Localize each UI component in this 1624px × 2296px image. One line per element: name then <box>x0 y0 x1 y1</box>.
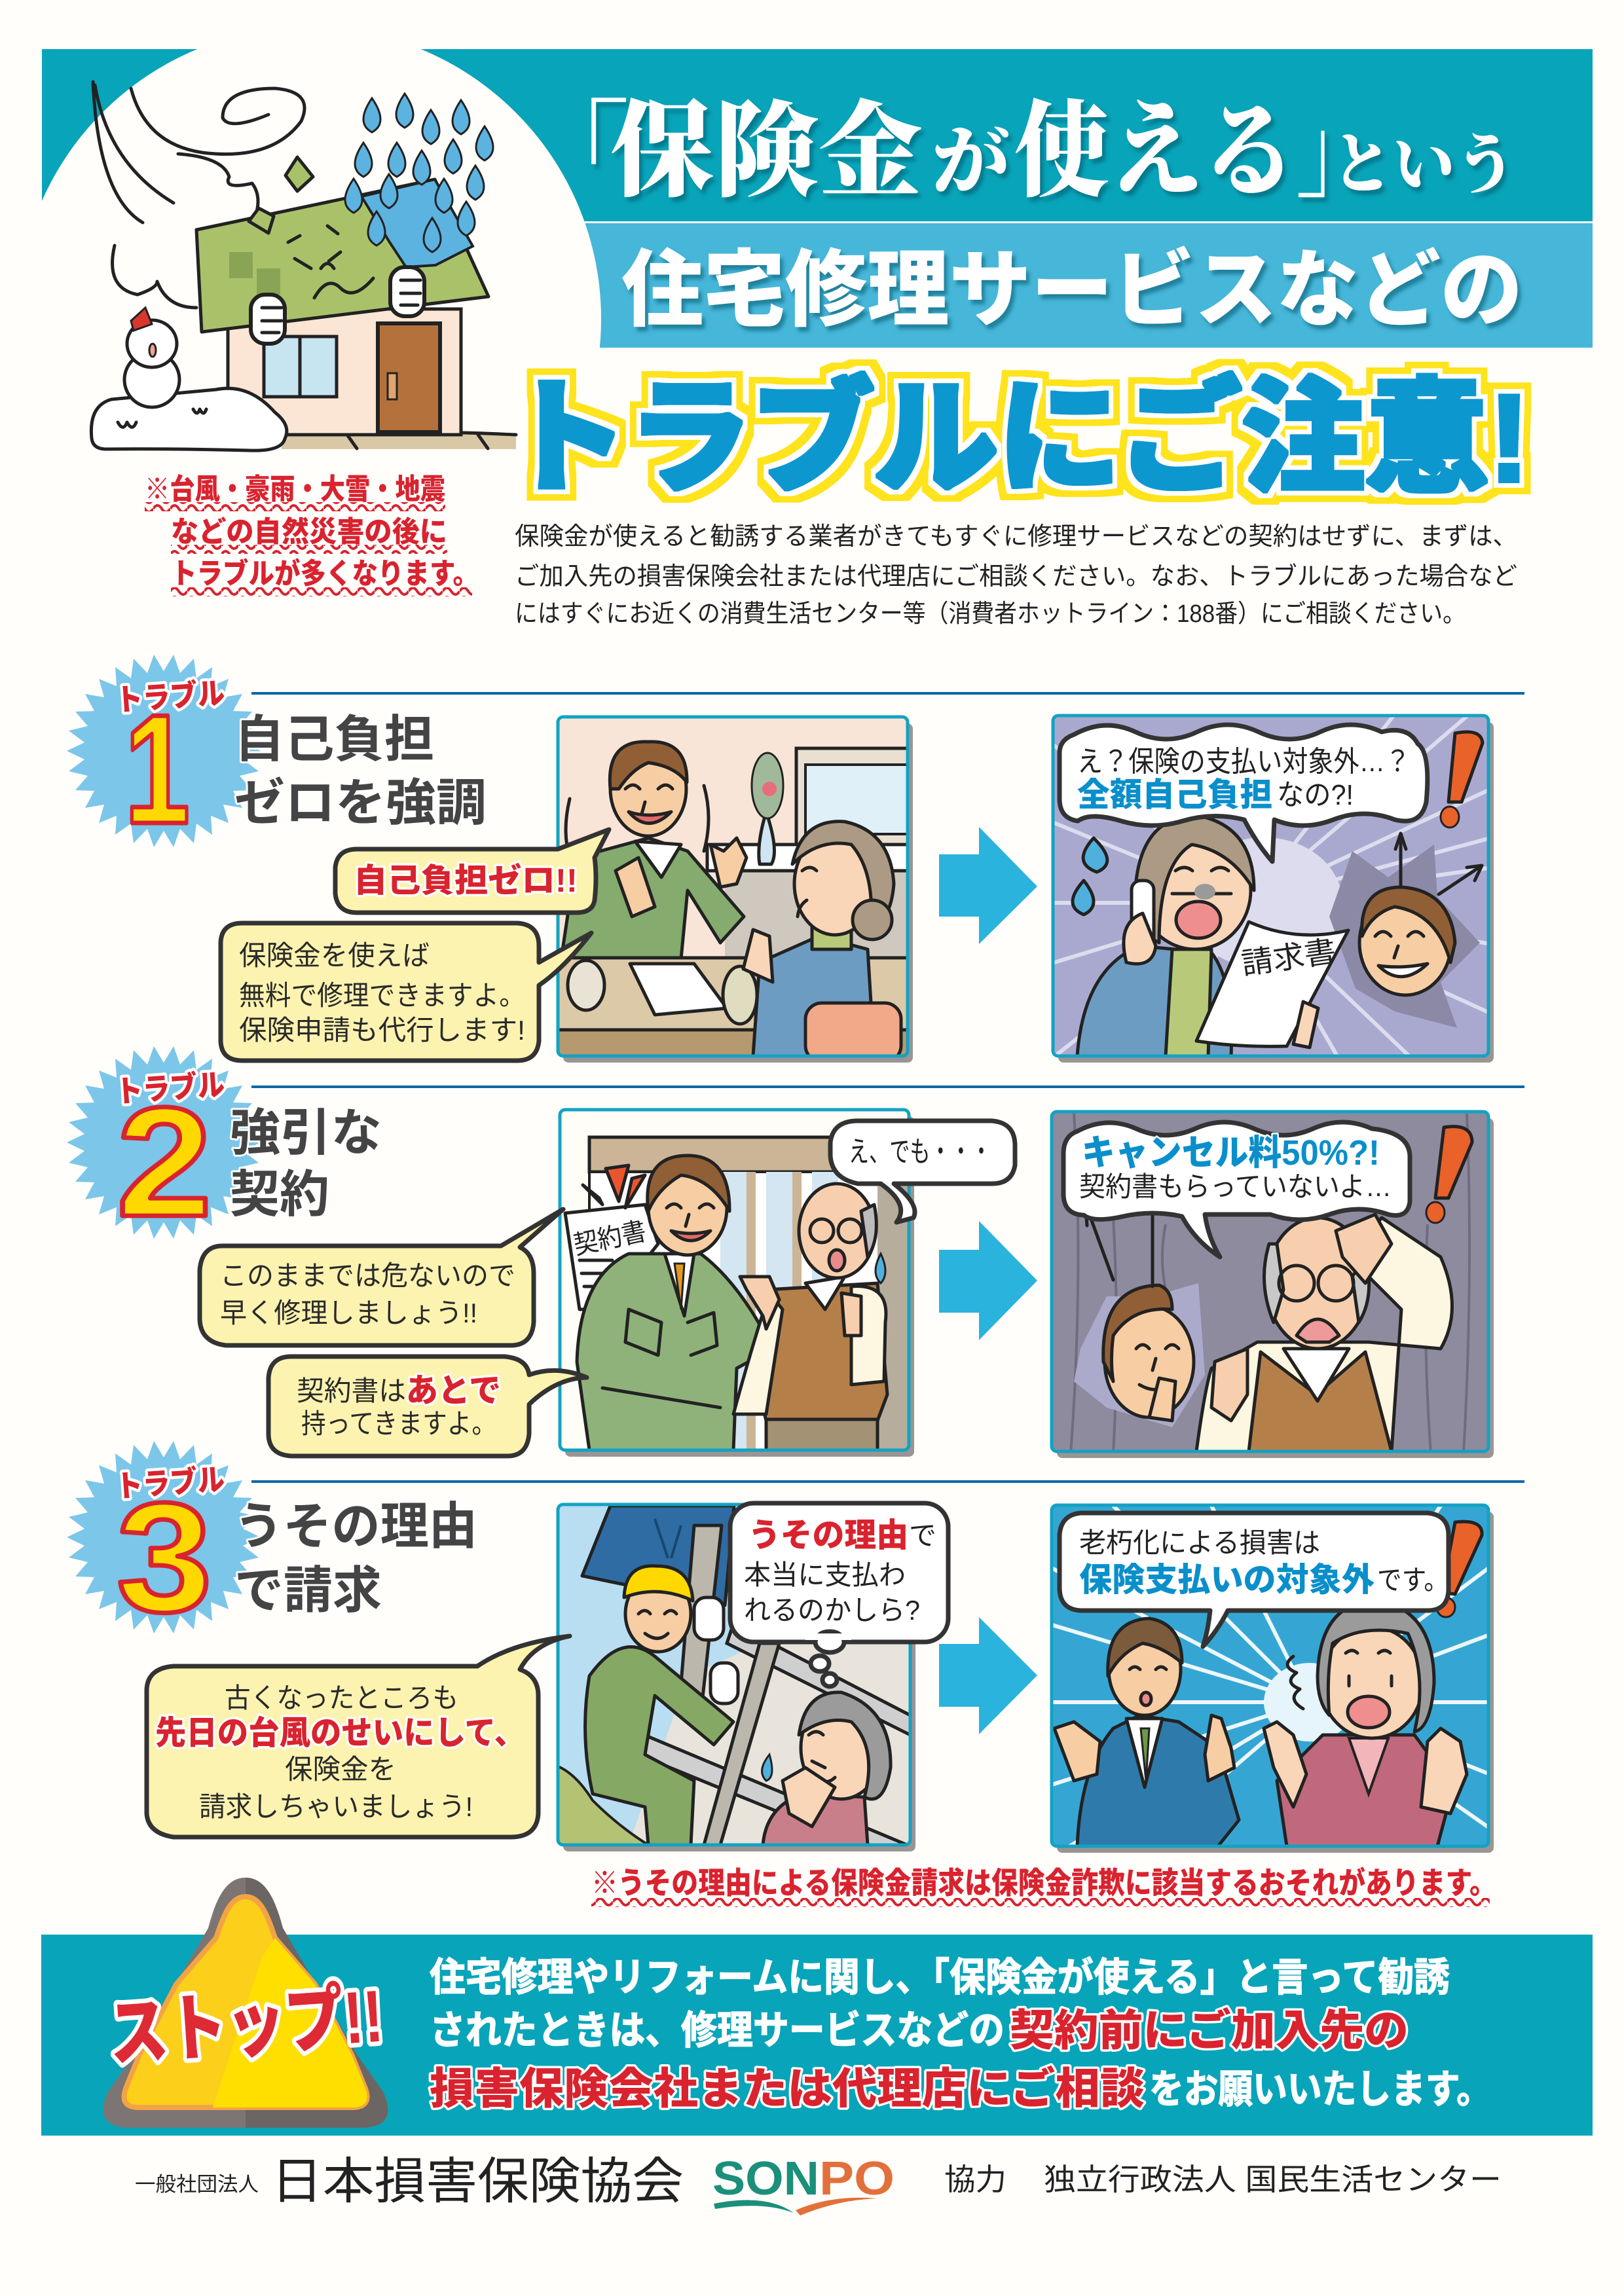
section 2: heading: 強引な <box>230 1105 382 1161</box>
exclamation mark <box>1441 732 1483 828</box>
speech bubble: not covered: です。 <box>1377 1565 1449 1595</box>
aura <box>1074 1283 1205 1427</box>
arrow 1 <box>939 827 1037 944</box>
intro paragraph <box>515 523 1517 628</box>
worried old man <box>1196 1214 1452 1451</box>
note: natural disasters: トラブルが多くなります。 <box>171 557 479 590</box>
section 1: speech bubble, zero deductible: 自己負担ゼロ!! <box>354 862 578 899</box>
logo: SONPO <box>712 2153 895 2215</box>
note: fraud warning: ※うその理由による保険金請求は保険金詐欺に該当するおそれがあります。 <box>591 1866 1496 1900</box>
footer: cooperation: 協力 <box>944 2162 1006 2196</box>
window <box>264 337 337 397</box>
section 2: bubble, but... <box>830 1121 1015 1222</box>
title line 1: 「 <box>524 67 629 217</box>
hands <box>251 267 424 344</box>
contract paper <box>565 1205 658 1309</box>
title line 1: 」 <box>1297 67 1375 217</box>
title line 1: が <box>932 101 1010 209</box>
section 2: right comic panel <box>1052 1112 1494 1458</box>
title line 1: 保険金 <box>611 67 922 217</box>
invoice <box>1196 922 1348 1048</box>
section 2: bubble, contract later: 持ってきますよ。 <box>301 1408 496 1439</box>
section 1: heading: ゼロを強調 <box>234 775 487 831</box>
vase with flowers <box>752 753 783 864</box>
grinning man <box>1359 833 1482 995</box>
raindrops <box>345 94 493 252</box>
upset woman <box>1264 1601 1467 1846</box>
footer: association: 一般社団法人 <box>135 2173 259 2196</box>
message: 契約前にご加入先の <box>1010 2006 1409 2054</box>
section 1: speech bubble, free repair: 保険申請も代行します! <box>239 1015 525 1046</box>
speech bubble: full deductible: なの?! <box>1277 779 1354 811</box>
section 3: thought bubble: うその理由 <box>748 1517 908 1554</box>
exclamation mark <box>1437 1522 1482 1617</box>
speech bubble: cancel fee: 契約書もらっていないよ… <box>1079 1171 1392 1202</box>
section 1: left comic panel <box>558 717 913 1063</box>
bush <box>558 1766 648 1845</box>
house wall <box>228 309 461 435</box>
aura <box>1329 845 1480 1028</box>
note: natural disasters <box>145 473 479 596</box>
section 3: left comic panel <box>558 1504 915 1866</box>
logo: SONPO: SON <box>712 2153 819 2205</box>
worried woman <box>1073 815 1254 1056</box>
section 1: right comic panel <box>851 655 1624 1211</box>
ladder <box>678 1525 779 1845</box>
intro paragraph: にはすぐにお近くの消費生活センター等（消費者ホットライン：188番）にご相談ください。 <box>515 600 1466 628</box>
speech bubble: cancel fee: キャンセル料50%?! <box>1082 1133 1380 1173</box>
section 1: speech bubble, free repair: 保険金を使えば <box>239 940 430 971</box>
section 2: bubble, contract later <box>268 1357 587 1456</box>
speech bubble: not covered <box>1060 1513 1449 1647</box>
section 2: left comic panel <box>560 1110 914 1457</box>
customer <box>743 822 901 1062</box>
logo: SONPO: PO <box>819 2153 895 2205</box>
section 2: bubble, but...: え、でも・・・ <box>849 1136 991 1168</box>
contract paper: 契約書 <box>571 1217 649 1260</box>
section 3: heading: うその理由 <box>234 1499 477 1555</box>
flying tiles <box>286 157 313 191</box>
arrow 3 <box>939 1617 1037 1734</box>
section 3: bubble, blame the typhoon <box>147 1636 570 1837</box>
footer: cooperation: 独立行政法人 国民生活センター <box>1044 2162 1502 2196</box>
section 2: heading: 契約 <box>230 1167 329 1223</box>
section 2: bubble, dangerous: 早く修理しましょう!! <box>220 1298 477 1328</box>
section 3: bubble, blame the typhoon: 請求しちゃいましょう! <box>199 1791 473 1822</box>
header banner <box>17 27 1593 611</box>
message: されたときは、修理サービスなどの <box>430 2009 1005 2052</box>
intro paragraph: 保険金が使えると勧誘する業者がきてもすぐに修理サービスなどの契約はせずに、まずは、 <box>515 523 1517 551</box>
section 3: heading <box>67 1441 477 1645</box>
section 3: thought bubble: 本当に支払わ <box>744 1559 906 1590</box>
section 3: right comic panel <box>982 1505 1572 1899</box>
section 2: heading: 2 <box>117 1076 212 1249</box>
note: natural disasters: などの自然災害の後に <box>171 516 447 548</box>
message: 損害保険会社または代理店にご相談 <box>430 2064 1145 2113</box>
worrying woman <box>762 1692 891 1845</box>
smirking man <box>1085 1167 1194 1421</box>
section 1: speech bubble, free repair <box>221 923 591 1061</box>
section 1: speech bubble, free repair: 無料で修理できますよ。 <box>239 980 525 1011</box>
title line 1: という <box>1331 112 1517 206</box>
section 2: heading: トラブル <box>115 1067 226 1109</box>
footer: association: 日本損害保険協会 <box>271 2154 684 2210</box>
section 3: thought bubble <box>730 1503 948 1686</box>
section 3: bubble, blame the typhoon: 先日の台風のせいにして、 <box>155 1715 525 1751</box>
section 1: heading <box>67 655 487 856</box>
exclamation mark <box>1426 1127 1472 1223</box>
intro paragraph: ご加入先の損害保険会社または代理店にご相談ください。なお、トラブルにあった場合など <box>515 563 1517 591</box>
worker <box>585 1566 738 1845</box>
speech bubble: full deductible <box>1060 725 1428 862</box>
section 1: heading: 1 <box>124 683 190 856</box>
title line 1: 使える <box>1015 67 1297 217</box>
stop label: ストップ!! <box>106 1975 386 2075</box>
arrow 2 <box>939 1221 1037 1340</box>
agent <box>1054 1618 1239 1846</box>
speech bubble: cancel fee <box>1063 1122 1410 1257</box>
signboard <box>582 1506 734 1605</box>
wind swirls <box>93 82 304 308</box>
table <box>558 958 908 1030</box>
old man <box>733 1184 887 1452</box>
section 1: heading: トラブル <box>115 676 226 718</box>
roof <box>196 179 489 332</box>
section 3: heading: トラブル <box>115 1462 226 1504</box>
message <box>430 1956 1491 2113</box>
section 2: bubble, dangerous <box>200 1209 563 1345</box>
title line 2: 住宅修理サービスなどの <box>621 244 1522 337</box>
invoice: 請求書 <box>1239 934 1338 981</box>
speech bubble: not covered: 保険支払いの対象外 <box>1079 1561 1375 1598</box>
bottom call-to-action band <box>41 1878 1593 2136</box>
section 3: bubble, blame the typhoon: 保険金を <box>285 1754 396 1785</box>
section 1: speech bubble, zero deductible <box>335 829 609 913</box>
section 3: heading: で請求 <box>234 1563 382 1619</box>
section 2: heading <box>67 1046 382 1249</box>
section 3: bubble, blame the typhoon: 古くなったところも <box>225 1683 458 1713</box>
warning cone <box>103 1878 388 2128</box>
section 2: bubble, dangerous: このままでは危ないので <box>220 1260 515 1291</box>
speech bubble: not covered: 老朽化による損害は <box>1079 1527 1320 1558</box>
section 1: heading: 自己負担 <box>234 712 434 768</box>
title line 1 <box>524 67 1517 217</box>
snow pile <box>91 388 287 450</box>
snowman <box>124 308 179 407</box>
message: 住宅修理やリフォームに関し、「保険金が使える」と言って勧誘 <box>430 1956 1450 1999</box>
ground <box>282 430 516 449</box>
section 3: heading: 3 <box>117 1471 212 1645</box>
illustration: damaged house <box>91 82 516 450</box>
message: をお願いいたします。 <box>1149 2068 1491 2111</box>
salesman <box>561 742 747 959</box>
section 3: thought bubble: で <box>909 1520 936 1551</box>
salesman <box>577 1156 773 1450</box>
section 3: thought bubble: れるのかしら? <box>744 1595 920 1626</box>
speech bubble: full deductible: え？保険の支払い対象外…？ <box>1077 746 1411 778</box>
section 2: bubble, contract later: あとで <box>406 1372 501 1409</box>
section 2: bubble, contract later: 契約書は <box>297 1376 406 1406</box>
speech bubble: full deductible: 全額自己負担 <box>1077 776 1272 813</box>
note: natural disasters: ※台風・豪雨・大雪・地震 <box>145 473 445 505</box>
title line 3: トラブルにご注意! <box>504 369 1530 508</box>
door <box>378 323 440 432</box>
